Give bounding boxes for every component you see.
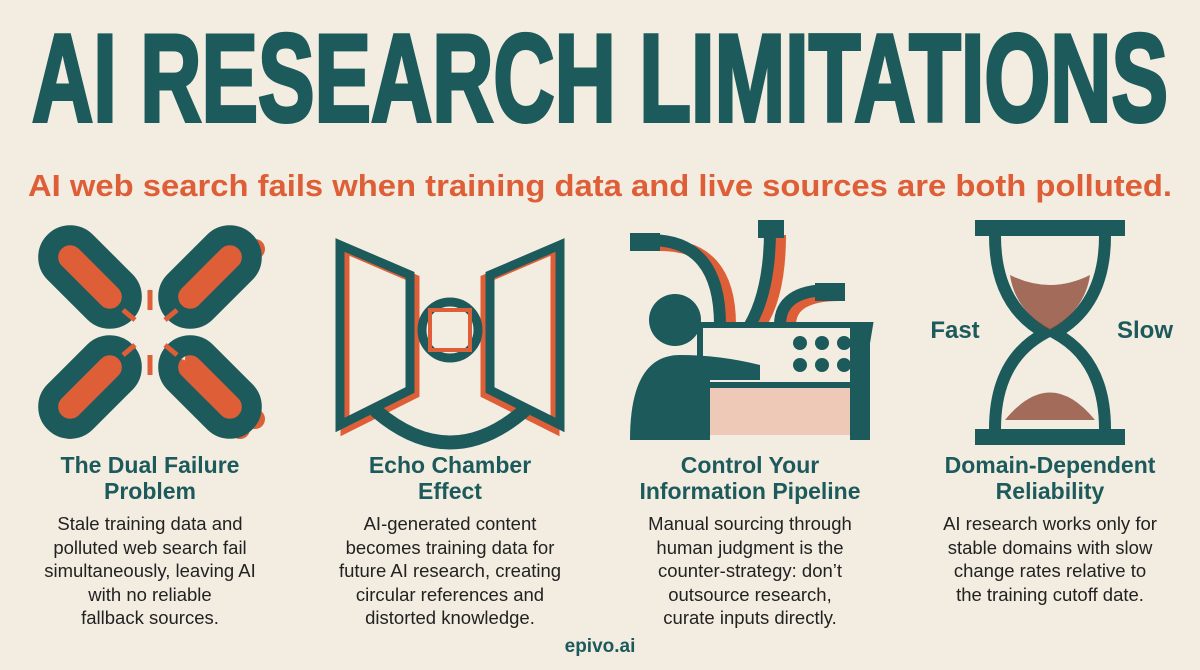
panel: echo chamber: becomes training data for — [346, 536, 554, 558]
panel: pipeline — [639, 452, 861, 628]
panel: dual failure: Problem — [104, 478, 196, 504]
panel: dual failure: The Dual Failure — [61, 452, 239, 478]
panel: echo chamber: distorted knowledge. — [365, 607, 535, 628]
panel: dual failure — [44, 452, 256, 628]
panel: pipeline: curate inputs directly. — [663, 607, 837, 628]
panel: pipeline: human judgment is the — [656, 536, 844, 558]
panel: dual failure: simultaneously, leaving AI — [44, 560, 256, 581]
icon: hourglass: Fast — [930, 317, 980, 344]
panel: echo chamber: AI-generated content — [364, 513, 536, 534]
icon: control pipeline — [630, 220, 874, 440]
panel: domain reliability: the training cutoff date. — [956, 584, 1144, 604]
panel: domain reliability: Reliability — [996, 478, 1104, 504]
icon: echo chamber mirrors — [336, 238, 564, 450]
panel: dual failure: Stale training data and — [57, 513, 243, 534]
panel: pipeline: counter-strategy: don’t — [658, 560, 842, 581]
panel: pipeline: Information Pipeline — [639, 478, 861, 504]
panel: echo chamber — [339, 452, 561, 628]
panel: domain reliability — [943, 452, 1157, 605]
panel: domain reliability: stable domains with slow — [948, 536, 1152, 558]
panel: pipeline: Control Your — [681, 452, 819, 478]
panel: echo chamber: circular references and — [356, 584, 544, 604]
icon: hourglass: Slow — [1117, 317, 1173, 344]
panel: dual failure: polluted web search fail — [53, 536, 247, 558]
panel: pipeline: Manual sourcing through — [648, 513, 852, 534]
panel: dual failure: with no reliable — [88, 584, 212, 604]
panel: domain reliability: AI research works only for — [943, 513, 1157, 534]
icon: hourglass — [930, 220, 1174, 445]
title: AI web search fails when training data and live sources are both polluted. — [28, 168, 1172, 203]
panel: echo chamber: Effect — [418, 478, 482, 504]
icon: broken chain — [38, 225, 265, 439]
panel: echo chamber: future AI research, creating — [339, 560, 561, 581]
panel: dual failure: fallback sources. — [81, 607, 219, 628]
panel: domain reliability: Domain-Dependent — [945, 452, 1155, 478]
footer: epivo.ai — [565, 636, 635, 657]
panel: echo chamber: Echo Chamber — [369, 452, 531, 478]
panel: domain reliability: change rates relative to — [954, 560, 1146, 581]
panel: pipeline: outsource research, — [668, 584, 832, 604]
